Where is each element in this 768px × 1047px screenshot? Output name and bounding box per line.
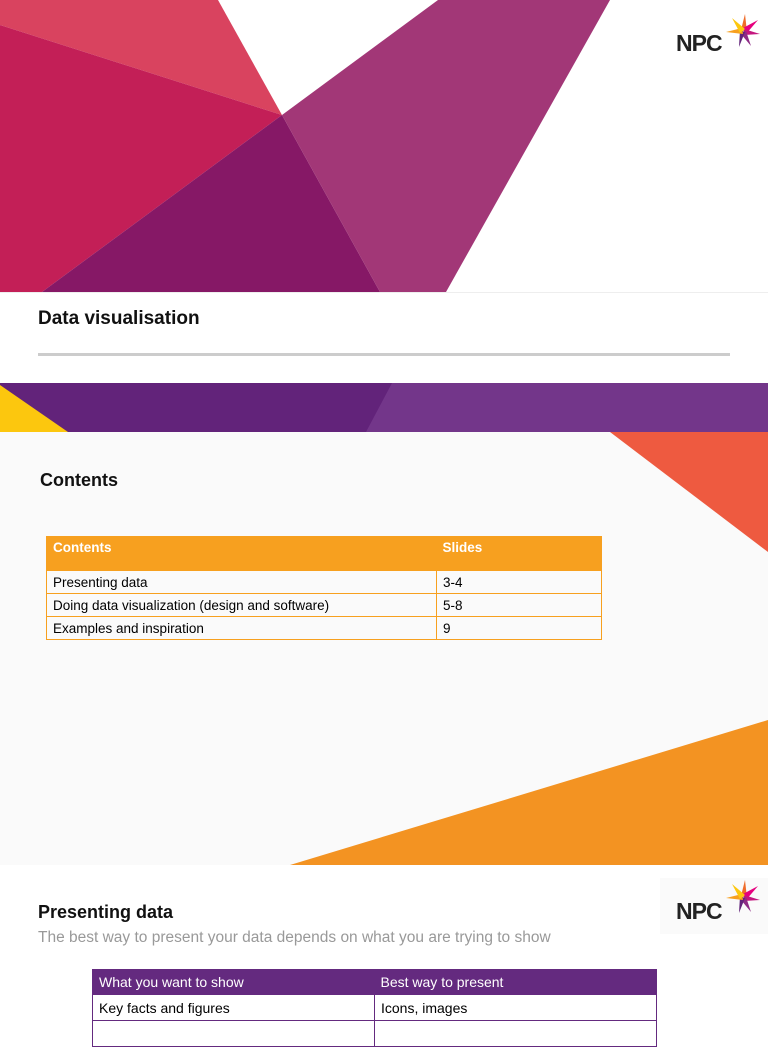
logo: NPC top [676, 14, 760, 56]
presenting table [92, 969, 657, 1047]
contents table: 9 [443, 620, 451, 636]
contents table: 3-4 [443, 574, 463, 590]
contents table: Presenting data [53, 574, 148, 590]
logo: NPC bottom: NPC [676, 898, 722, 924]
contents table: Slides [442, 540, 482, 555]
presenting table: Icons, images [381, 1000, 467, 1016]
contents table [46, 536, 602, 640]
title band: Data visualisation [38, 308, 200, 329]
presenting table: Best way to present [380, 974, 503, 990]
title band [0, 292, 768, 383]
subtitle: The best way to present your data depends on what you are trying to show [38, 929, 551, 946]
logo: NPC top: NPC [676, 30, 722, 56]
presenting table: Key facts and figures [99, 1000, 230, 1016]
logo: NPC bottom [660, 878, 768, 934]
contents table: 5-8 [443, 598, 463, 612]
presenting table: What you want to show [99, 974, 244, 990]
contents table: Examples and inspiration [53, 620, 204, 636]
contents table: Doing data visualization (design and software) [53, 598, 329, 612]
heading: Presenting data: Presenting data [38, 902, 173, 922]
heading: Contents: Contents [40, 470, 118, 490]
contents table: Contents [53, 540, 112, 555]
